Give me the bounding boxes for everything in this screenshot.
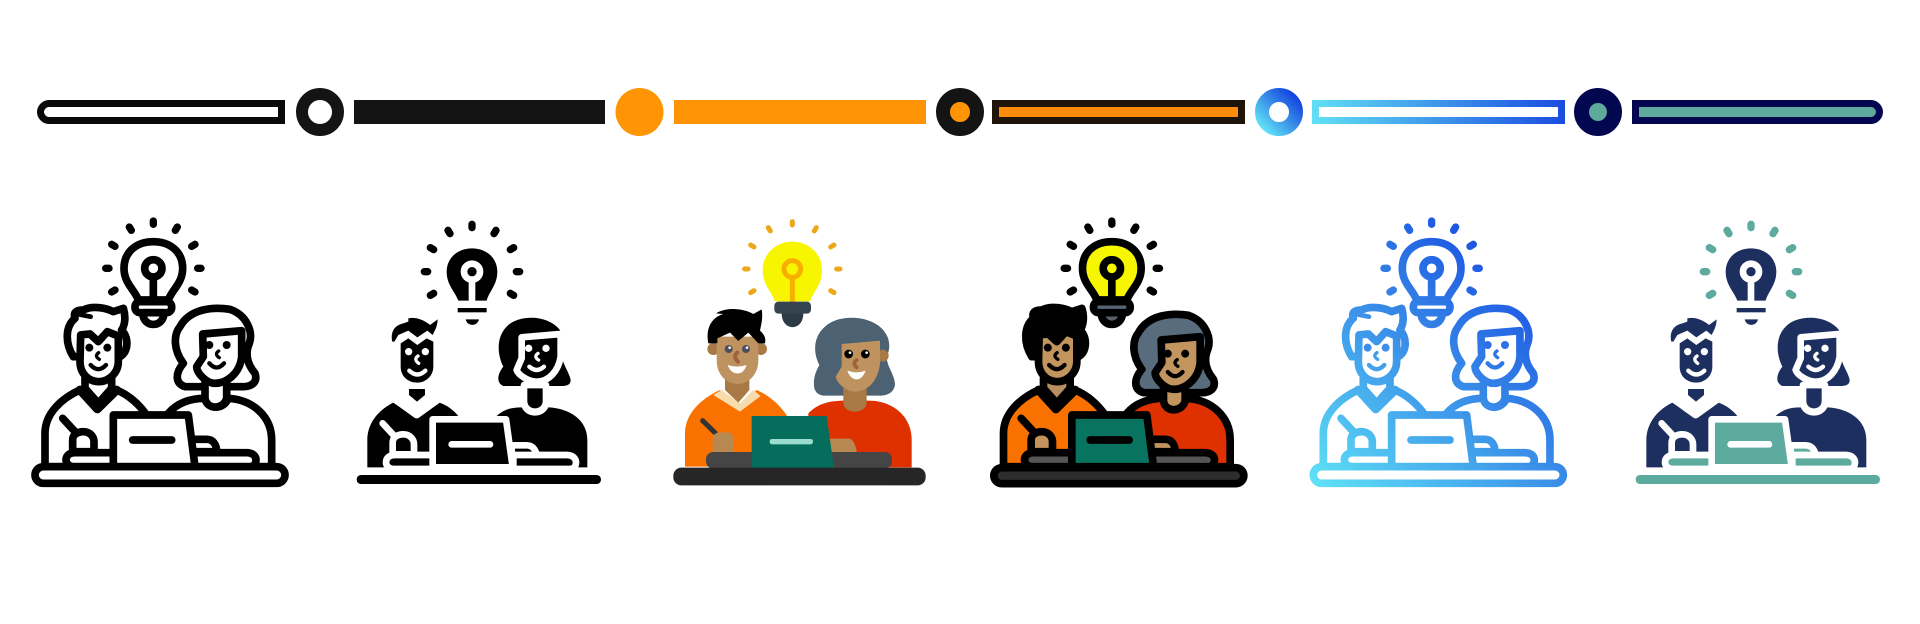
hands and keyboards (360, 423, 600, 474)
desk (673, 468, 926, 485)
desk (994, 468, 1244, 484)
laptop (1392, 415, 1473, 467)
man (367, 318, 458, 467)
laptop (752, 416, 834, 468)
desk (35, 467, 285, 483)
node: gradient ring (1262, 95, 1296, 129)
hands and keyboards (63, 418, 256, 467)
icon: filled line style team with idea (994, 221, 1244, 484)
man (1646, 318, 1737, 467)
laptop (113, 415, 195, 467)
bar: black outline (40, 104, 282, 120)
bar: gradient outline (1312, 100, 1565, 124)
laptop (1072, 415, 1153, 467)
node: black ring with orange centre (943, 95, 977, 129)
laptop (1712, 419, 1792, 467)
light bulb (1064, 221, 1159, 324)
woman (1447, 308, 1550, 467)
light bulb (1703, 224, 1799, 325)
bar: teal with navy border (1636, 104, 1880, 120)
woman (1127, 314, 1230, 467)
light bulb (745, 222, 840, 327)
desk (1636, 475, 1880, 484)
desk (1313, 467, 1563, 483)
hands and keyboards (1341, 418, 1534, 467)
hands and keyboards (1639, 423, 1879, 474)
desk (357, 475, 601, 484)
man (45, 307, 147, 467)
icon: flat colour team with idea (673, 222, 926, 485)
light bulb (106, 221, 201, 324)
hands and keyboards (1021, 418, 1214, 467)
laptop (433, 419, 513, 467)
man (1003, 307, 1105, 467)
woman (1776, 318, 1866, 467)
woman (497, 318, 587, 467)
hands and keyboards (703, 421, 892, 469)
light bulb (424, 224, 520, 325)
icon: line style team with idea (35, 221, 285, 483)
node: orange disc (616, 88, 664, 136)
node: navy ring with teal centre (1582, 96, 1614, 128)
icon: gradient line style team with idea (1313, 221, 1563, 483)
bar: solid orange (674, 100, 926, 124)
woman (168, 308, 272, 467)
bar: solid black (354, 100, 605, 124)
bar: orange with dark border (996, 104, 1242, 120)
icon: glyph style team with idea (357, 224, 601, 484)
man (1323, 307, 1425, 467)
timeline strip (40, 88, 1880, 136)
woman (808, 318, 912, 467)
node: black ring (302, 94, 338, 130)
icon: navy and teal glyph style team with idea (1636, 224, 1880, 484)
man (685, 309, 787, 467)
light bulb (1384, 221, 1479, 324)
